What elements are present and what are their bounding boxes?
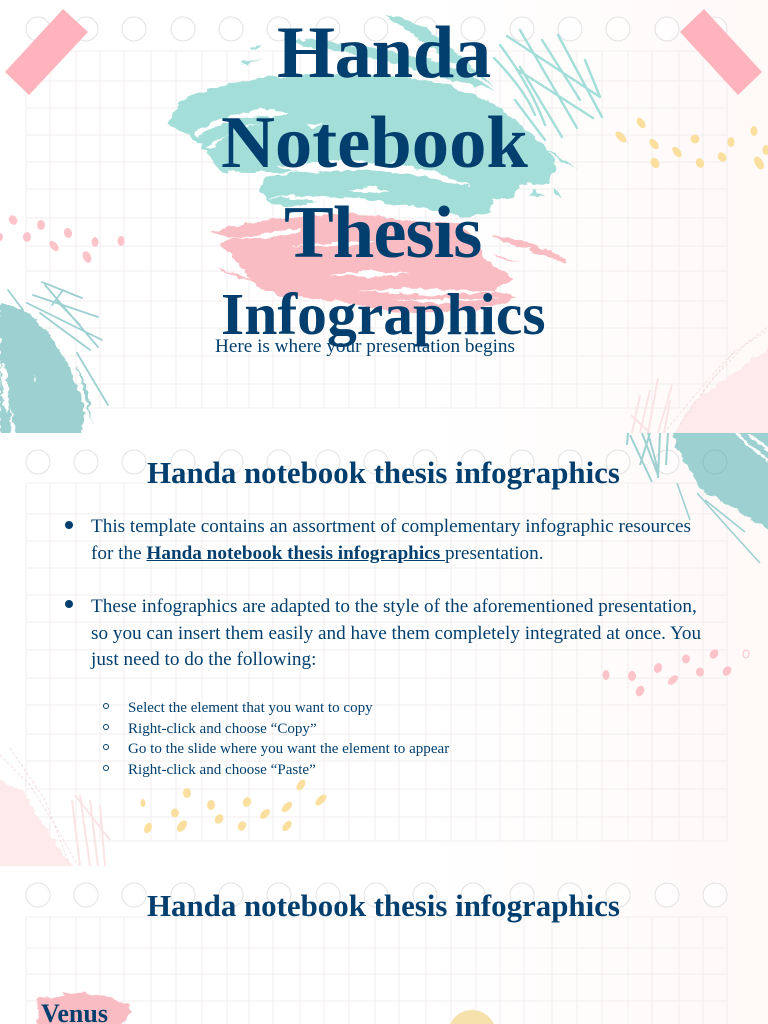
title line 4: Infographics — [221, 281, 546, 347]
faded pink brush bottom left — [0, 748, 110, 870]
yellow circle — [448, 1010, 496, 1024]
pink tape right — [680, 9, 762, 95]
bullet 2 — [65, 600, 73, 608]
title line 2: Notebook — [221, 101, 528, 184]
paragraph 1 line 2: for the Handa notebook thesis infographics presentation. — [91, 543, 544, 564]
step 1: Select the element that you want to copy — [128, 700, 373, 716]
subtitle: Here is where your presentation begins — [215, 336, 515, 357]
teal brush bottom left — [0, 303, 92, 436]
pink brush stroke behind title — [210, 213, 567, 313]
title line 1: Handa — [277, 11, 491, 94]
step 2: Right-click and choose “Copy” — [128, 721, 317, 737]
yellow dots right — [614, 116, 768, 171]
sub-bullet 3 — [103, 744, 109, 750]
paragraph 2 line 3: just need to do the following: — [91, 649, 316, 670]
bullet 1 — [65, 521, 73, 529]
pink tape left — [5, 9, 88, 95]
teal brush top right — [627, 430, 768, 563]
sub-bullet 4 — [103, 765, 109, 771]
panel: title slide — [0, 0, 768, 433]
pink dots left — [0, 214, 124, 264]
sub-bullet 1 — [103, 703, 109, 709]
paragraph 2 line 1: These infographics are adapted to the style of the aforementioned presentation, — [91, 596, 697, 617]
heading: Handa notebook thesis infographics — [147, 455, 620, 490]
pink brush behind Venus — [36, 992, 132, 1024]
binder holes — [26, 450, 727, 474]
panel: third slide — [0, 866, 768, 1024]
heading: Handa notebook thesis infographics — [147, 888, 620, 923]
teal scribble top right — [494, 30, 602, 140]
yellow dots bottom — [140, 778, 328, 834]
teal scribble bottom left — [8, 282, 108, 405]
paragraph 2 line 2: so you can insert them easily and have them completely integrated at once. You — [91, 623, 701, 644]
binder holes — [26, 883, 727, 907]
faded pink brush bottom right — [631, 325, 768, 436]
panel: instructions slide — [0, 433, 768, 866]
pink dots right — [602, 648, 749, 698]
paragraph 1 line 1: This template contains an assortment of complementary infographic resources — [91, 516, 691, 537]
title line 3: Thesis — [284, 191, 481, 274]
step 4: Right-click and choose “Paste” — [128, 762, 316, 778]
binder holes — [26, 17, 727, 41]
sub-bullet 2 — [103, 724, 109, 730]
step 3: Go to the slide where you want the element to appear — [128, 741, 449, 757]
teal brush stroke behind title — [168, 15, 578, 217]
